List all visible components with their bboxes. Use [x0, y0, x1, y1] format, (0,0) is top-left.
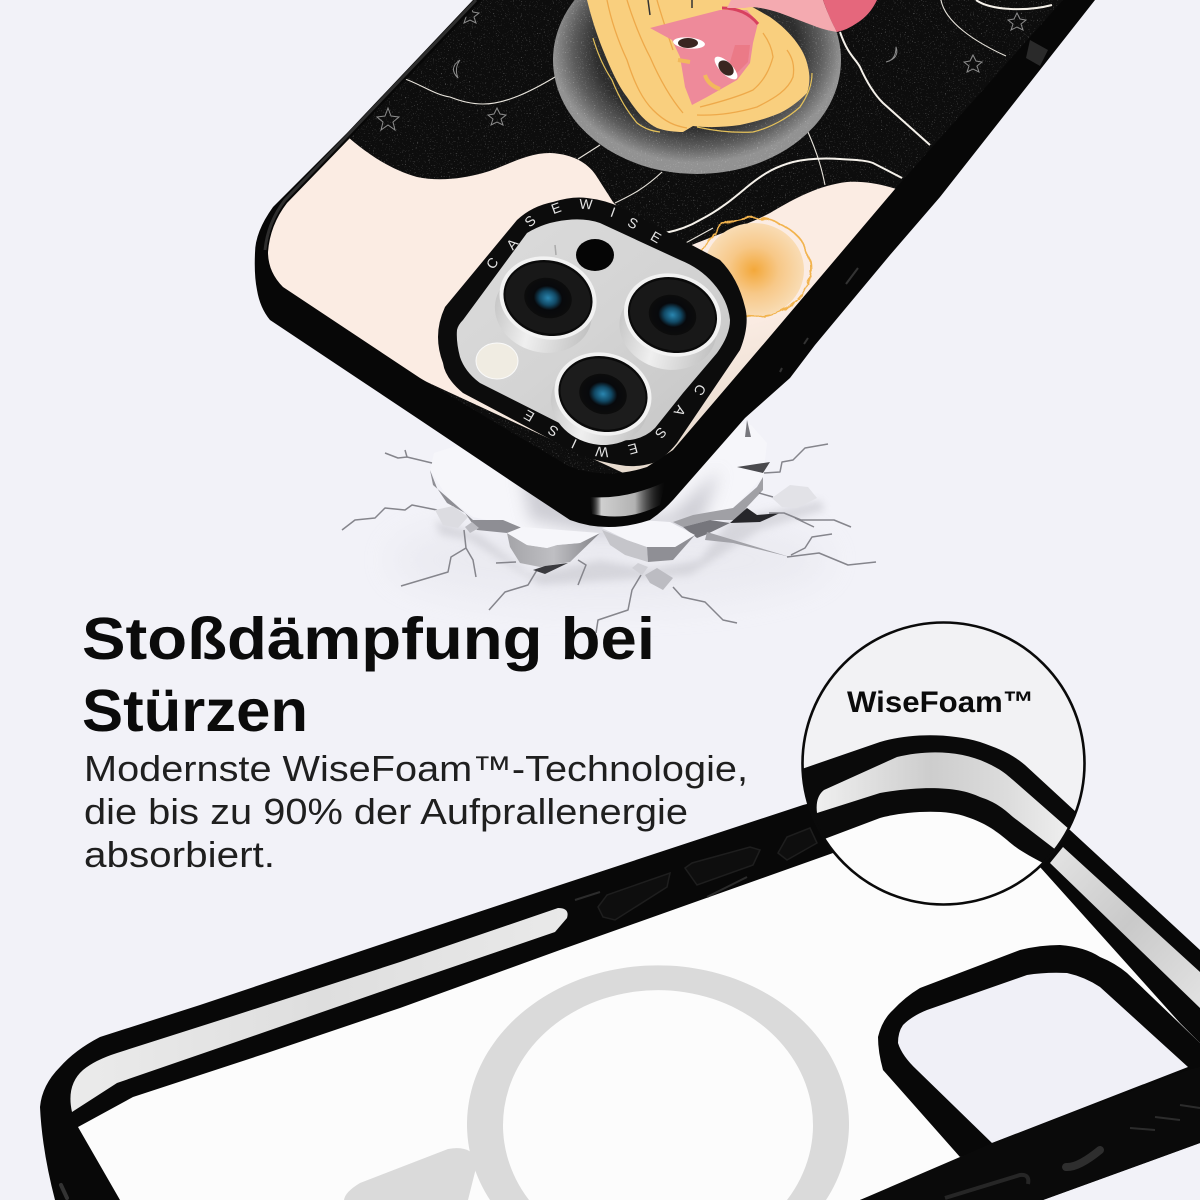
camera window: [898, 973, 1188, 1143]
black wedge: [737, 462, 770, 473]
left plate wall: [430, 470, 522, 533]
magnified corner: [804, 735, 1075, 903]
callout label: WiseFoam™: [847, 686, 1034, 719]
casewise label bottom: S: [545, 422, 561, 440]
callout: WiseFoam circle: [802, 622, 1084, 904]
casewise label top: I: [608, 204, 618, 220]
circle outline: [802, 622, 1084, 904]
case body: [255, 0, 1095, 527]
hair strands: [607, 0, 794, 128]
stone cast shadows: [435, 500, 825, 585]
foam gap right: [1050, 847, 1200, 1008]
dress red: [823, 0, 877, 32]
casewise label bottom: A: [670, 403, 689, 420]
left tiny pebble: [465, 522, 479, 533]
casewise label top: S: [521, 212, 539, 230]
lower clear case: [40, 780, 1200, 1200]
magnifier disc: [802, 622, 1084, 904]
thin wave lines: [405, 0, 1006, 245]
casewise label top: C: [483, 254, 501, 272]
flash: [476, 343, 518, 379]
artwork: [250, 0, 1080, 490]
upper sliver: [745, 420, 751, 437]
island frame: [438, 198, 747, 466]
side buttons: [598, 828, 817, 920]
crack lines: [342, 444, 876, 633]
lens 1: [485, 245, 606, 364]
eye right: [714, 56, 738, 80]
night sky: [250, 0, 1080, 490]
dark gap: [730, 508, 780, 523]
neck line: [722, 8, 758, 24]
body text: absorbiert.: [84, 834, 275, 875]
moon: [553, 0, 841, 174]
casewise label bottom: E: [521, 407, 537, 425]
body text: Modernste WiseFoam™-Technologie,: [84, 748, 748, 789]
camera island: [438, 196, 747, 466]
casewise label top: W: [579, 196, 594, 212]
face: [650, 10, 758, 105]
small pebble: [632, 563, 648, 575]
microphone hole: [576, 239, 614, 271]
frame silhouette: [40, 780, 1200, 1200]
moon stipple: [553, 0, 841, 174]
stars and crescents: [377, 6, 1026, 130]
left cutout: [61, 1185, 67, 1198]
right plate wall: [673, 477, 763, 527]
stone left: top: [507, 527, 600, 548]
casewise label bottom: [521, 381, 709, 461]
mic mark: [555, 245, 556, 255]
foam gap left: [70, 908, 568, 1112]
casewise label bottom: W: [594, 443, 609, 461]
cheek marks: [678, 60, 720, 89]
lower edge wedge: [860, 1067, 1200, 1200]
side details: [780, 268, 858, 372]
raised white plates: [430, 400, 767, 533]
casewise label top: E: [549, 199, 563, 217]
casewise label bottom: E: [626, 440, 640, 458]
cracked ground: [342, 400, 876, 633]
bold wave lines: [665, 0, 1052, 233]
face shadow: [730, 45, 750, 75]
gap wall: [683, 520, 730, 538]
glossy highlight: [590, 482, 665, 517]
magsafe ring: [467, 965, 849, 1200]
port cutout: [1066, 1150, 1100, 1167]
casewise label top: [483, 196, 664, 272]
phone contact shadow: [520, 470, 720, 535]
lashes: [648, 0, 692, 15]
casewise label top: A: [503, 235, 522, 253]
stone right: left face: [602, 530, 648, 562]
body text: die bis zu 90% der Aufprallenergie: [84, 791, 688, 832]
eye left: [673, 37, 705, 49]
gold hair outline: [593, 38, 812, 132]
magnified foam gap: [817, 752, 1070, 850]
right pebble: [772, 485, 817, 508]
casewise label bottom: I: [569, 436, 579, 452]
hair: [587, 0, 809, 132]
stone right: top: [602, 520, 695, 547]
casewise label bottom: S: [652, 424, 670, 442]
magsafe pill: [344, 1148, 478, 1200]
sun outline: [696, 216, 808, 314]
camera frame: [878, 945, 1200, 1157]
side button: [1026, 40, 1048, 66]
clear interior: [78, 830, 1200, 1200]
lower edge stripes: [1130, 1105, 1200, 1130]
speckle: [250, 0, 1080, 490]
stone left: shadow wedge: [533, 563, 568, 574]
pebble: [645, 568, 673, 590]
magnified clear interior: [826, 812, 1041, 903]
dress light: [727, 0, 837, 32]
stone left: side: [507, 533, 600, 567]
body text: [84, 748, 748, 875]
casewise label top: S: [625, 214, 641, 232]
left pebble: [435, 506, 468, 528]
top phone with case: [250, 0, 1095, 527]
heading: [82, 606, 655, 744]
casewise label bottom: C: [691, 381, 709, 399]
ground shadow: [390, 515, 830, 605]
lens 2: [610, 262, 730, 381]
magnified band: [804, 735, 1075, 862]
phone body silver: [457, 219, 730, 441]
stone right: right face: [647, 535, 695, 562]
band seam lines: [575, 877, 747, 900]
lens 3: [542, 341, 661, 456]
sun: [704, 223, 804, 317]
casewise label top: E: [648, 228, 664, 246]
heading: Stoßdämpfung bei: [82, 606, 655, 672]
cream hills: [268, 138, 896, 472]
lower plate wall: [705, 532, 790, 557]
speaker cutout: [945, 1175, 1028, 1198]
band highlight: [265, 0, 476, 250]
heading: Stürzen: [82, 678, 308, 744]
